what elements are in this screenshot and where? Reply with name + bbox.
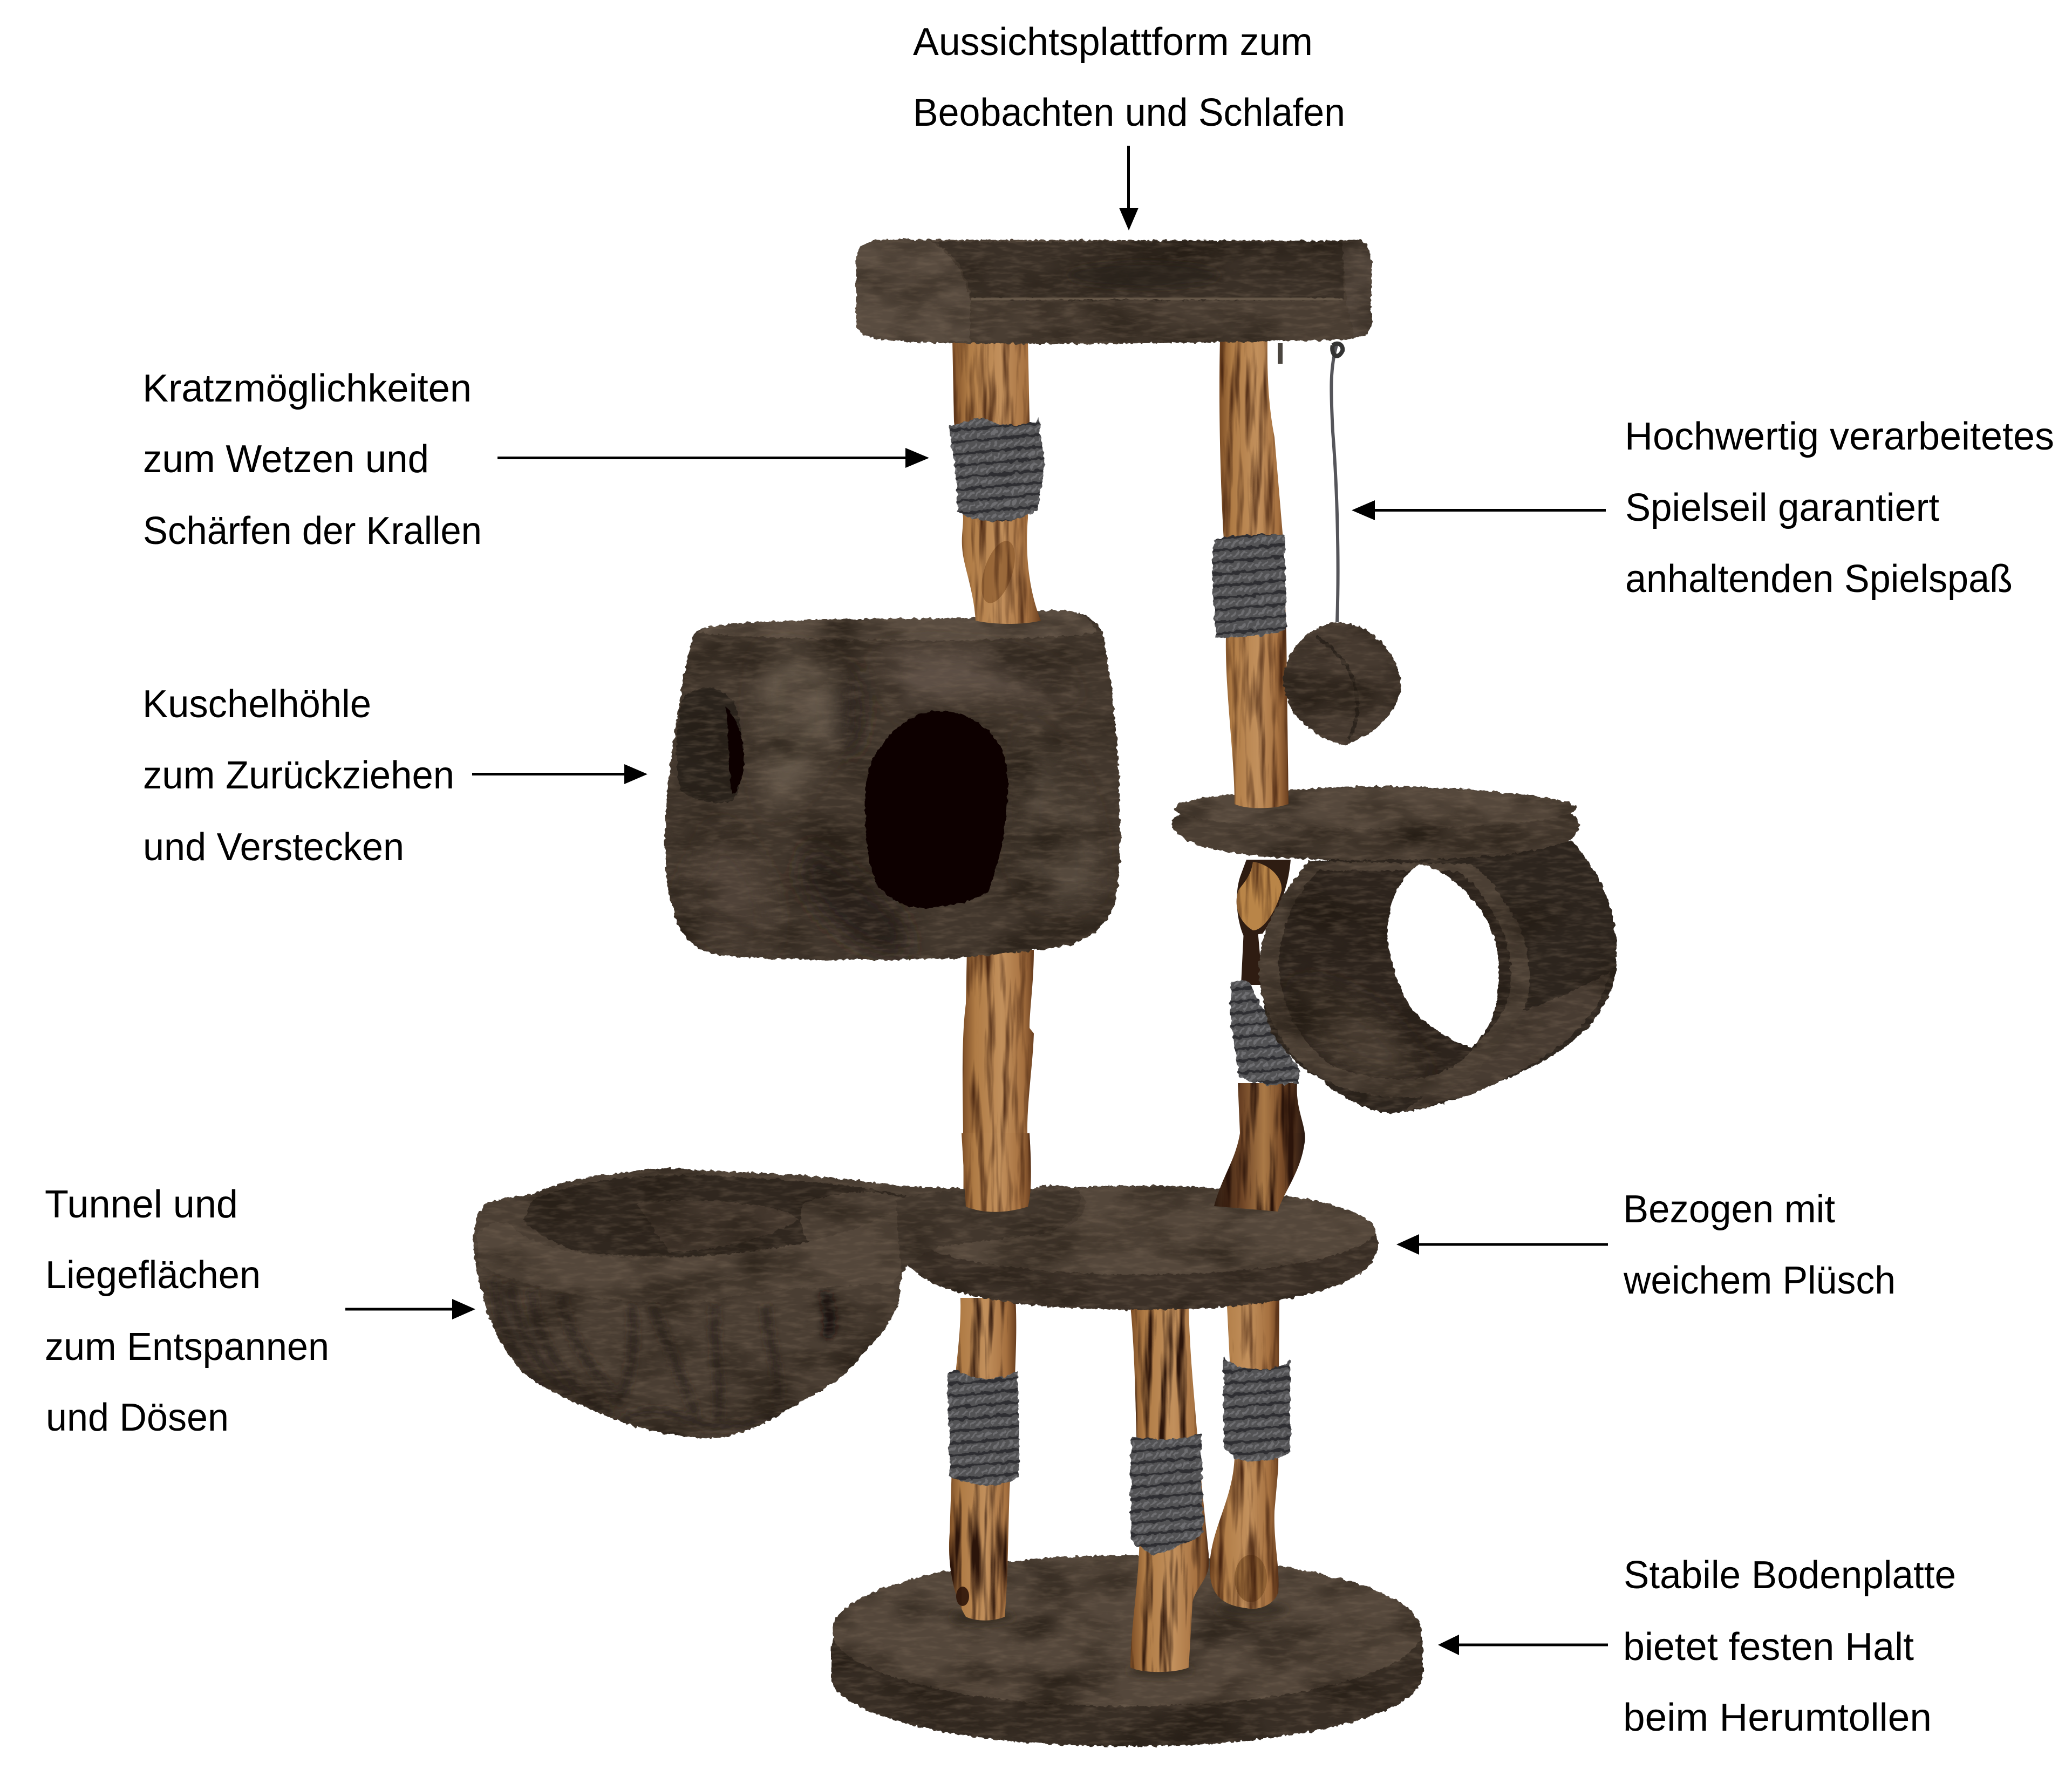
sisal wrap: middle right xyxy=(1230,979,1300,1085)
shelf: small platform xyxy=(1171,786,1579,860)
label: play rope: Hochwertig verarbeitetes xyxy=(1625,415,2054,458)
label: plush: Bezogen mit xyxy=(1623,1188,1835,1231)
label: base plate: bietet festen Halt xyxy=(1623,1625,1914,1669)
post: middle left (below cuddle cave) xyxy=(963,950,1034,1209)
arrow: scratching xyxy=(497,448,929,468)
label: tunnel and lying surfaces: zum Entspannen xyxy=(45,1325,329,1369)
label: scratching: Kratzmöglichkeiten xyxy=(142,367,472,410)
right armrest xyxy=(1342,239,1372,337)
sisal wrap: upper left xyxy=(949,417,1045,521)
sisal wrap: upper right xyxy=(1213,534,1286,638)
cuddle cave xyxy=(665,610,1120,960)
label: cuddle cave xyxy=(142,683,454,869)
post: base of dark wood branch xyxy=(1214,1133,1304,1212)
label: plush xyxy=(1623,1188,1896,1302)
post: upper left xyxy=(952,340,1041,624)
arrow: hammock xyxy=(345,1299,475,1319)
label: base plate xyxy=(1623,1554,1956,1739)
label: viewing platform: Beobachten und Schlafen xyxy=(913,91,1345,134)
post: base of middle left (in front of strap) xyxy=(962,1133,1031,1212)
middle platform xyxy=(903,1186,1378,1310)
post: lower left xyxy=(949,1298,1016,1621)
arrow: base plate xyxy=(1438,1635,1608,1655)
post holes in base plate xyxy=(951,1602,1287,1677)
tunnel opening xyxy=(1387,864,1499,1047)
post: lower centre xyxy=(1130,1306,1209,1672)
label: cuddle cave: und Verstecken xyxy=(143,826,404,869)
label: tunnel and lying surfaces: Tunnel und xyxy=(45,1183,238,1226)
tunnel xyxy=(1259,840,1617,1113)
strap around post xyxy=(896,1188,1080,1274)
label: play rope xyxy=(1625,415,2054,601)
label: tunnel and lying surfaces: Liegeflächen xyxy=(45,1254,261,1297)
arrow: plush xyxy=(1396,1234,1608,1255)
arrow: play rope xyxy=(1352,500,1606,520)
hammock folds xyxy=(494,1279,830,1427)
label: scratching: Schärfen der Krallen xyxy=(143,509,482,553)
label: tunnel and lying surfaces xyxy=(45,1183,329,1439)
label: play rope: anhaltenden Spielspaß xyxy=(1625,557,2013,601)
hammock with strap xyxy=(473,1168,1086,1439)
play rope xyxy=(1278,343,1342,622)
label: base plate: beim Herumtollen xyxy=(1623,1696,1932,1739)
backrest xyxy=(933,242,1344,300)
tunnel inside xyxy=(1279,870,1511,1079)
post: upper right xyxy=(1219,340,1289,808)
base plate xyxy=(831,1555,1423,1746)
left armrest xyxy=(856,240,970,342)
cave side opening xyxy=(677,688,743,802)
label: scratching: zum Wetzen und xyxy=(143,438,429,481)
tunnel outer wall xyxy=(1259,840,1617,1113)
label: viewing platform xyxy=(913,21,1345,134)
label: play rope: Spielseil garantiert xyxy=(1625,486,1939,529)
label: tunnel and lying surfaces: und Dösen xyxy=(46,1396,229,1439)
label: base plate: Stabile Bodenplatte xyxy=(1624,1554,1956,1597)
hammock back wall xyxy=(523,1175,906,1256)
sisal wrap: lower centre xyxy=(1130,1433,1204,1555)
hammock rim xyxy=(476,1209,917,1303)
platform shadow patch xyxy=(1068,262,1219,288)
label: cuddle cave: zum Zurückziehen xyxy=(143,754,454,797)
tunnel rim xyxy=(1259,861,1530,1098)
arrow: viewing platform xyxy=(1119,146,1139,230)
post: middle right, dark wood xyxy=(1214,860,1305,1209)
arrow: cuddle cave xyxy=(472,764,648,784)
cave side opening slit xyxy=(726,707,744,794)
cave front opening xyxy=(865,711,1008,908)
pom-pom ball xyxy=(1284,622,1400,745)
sisal wrap: lower left xyxy=(948,1370,1019,1485)
top viewing platform xyxy=(856,239,1372,344)
label: cuddle cave: Kuschelhöhle xyxy=(142,683,371,726)
cave lid xyxy=(699,610,1095,641)
platform lip highlight xyxy=(971,298,1342,300)
label: scratching xyxy=(142,367,482,553)
post: lower right xyxy=(1210,1295,1279,1609)
sisal wrap: lower right xyxy=(1223,1357,1291,1461)
label: viewing platform: Aussichtsplattform zum xyxy=(913,21,1313,64)
label: plush: weichem Plüsch xyxy=(1623,1259,1896,1302)
